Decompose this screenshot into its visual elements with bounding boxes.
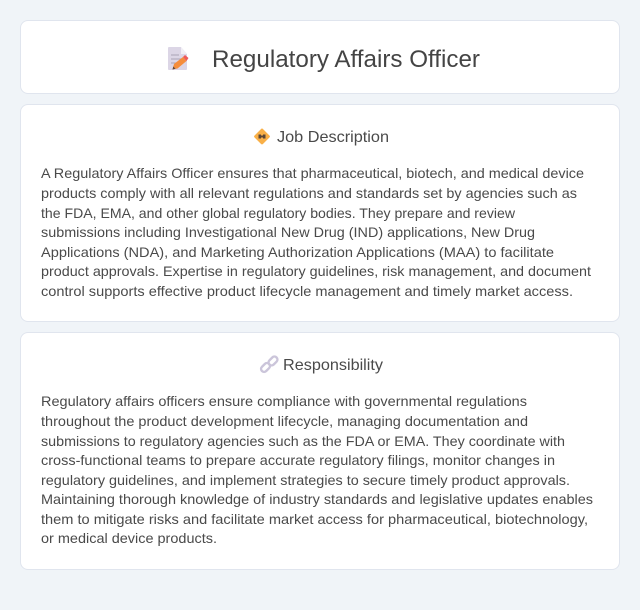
heading: responsibility: Responsibility <box>283 357 383 374</box>
text block: job description: control supports effective product lifecycle management and timely market access. <box>41 283 573 299</box>
text block: job description: A Regulatory Affairs Officer ensures that pharmaceutical, biotech, and medical device <box>41 165 584 181</box>
panel: title card <box>20 20 620 94</box>
text block: responsibility: regulatory guidelines, and implement strategies to secure timely product approvals. <box>41 472 570 488</box>
text block: responsibility: Regulatory affairs officers ensure compliance with governmental regulations <box>41 393 527 409</box>
text block: job description: product approvals. Expertise in regulatory guidelines, risk management, and document <box>41 263 591 279</box>
icon: document with pencil <box>168 47 188 70</box>
text block: job description: Applications (NDA), and Marketing Authorization Applications (MAA) to facilitate <box>41 244 554 260</box>
text block: job description: submissions including Investigational New Drug (IND) applications, New Drug <box>41 224 535 240</box>
icon: orange diamond <box>254 128 270 145</box>
text block: responsibility: Maintaining thorough knowledge of industry standards and legislative updates enables <box>41 491 593 507</box>
text block: responsibility: them to mitigate risks and facilitate market access for pharmaceutical, biotechnology, <box>41 511 588 527</box>
panel: responsibility card <box>20 332 620 570</box>
text block: job description: products comply with all relevant regulations and standards set by agencies such as <box>41 185 577 201</box>
panel: job description card <box>20 104 620 322</box>
text block: responsibility: cross-functional teams to prepare accurate regulatory filings, monitor changes in <box>41 452 555 468</box>
text block: responsibility: throughout the product development lifecycle, managing documentation and <box>41 413 528 429</box>
title: Regulatory Affairs Officer <box>212 46 480 73</box>
text block: responsibility <box>41 393 593 546</box>
heading: job description: Job Description <box>277 129 389 146</box>
text block: job description: the FDA, EMA, and other global regulatory bodies. They prepare and review <box>41 205 516 221</box>
text block: job description <box>41 165 591 299</box>
text block: responsibility: or medical device products. <box>41 530 217 546</box>
text block: responsibility: submissions to regulatory agencies such as the FDA or EMA. They coordinate with <box>41 433 565 449</box>
icon: chain link <box>260 355 279 373</box>
